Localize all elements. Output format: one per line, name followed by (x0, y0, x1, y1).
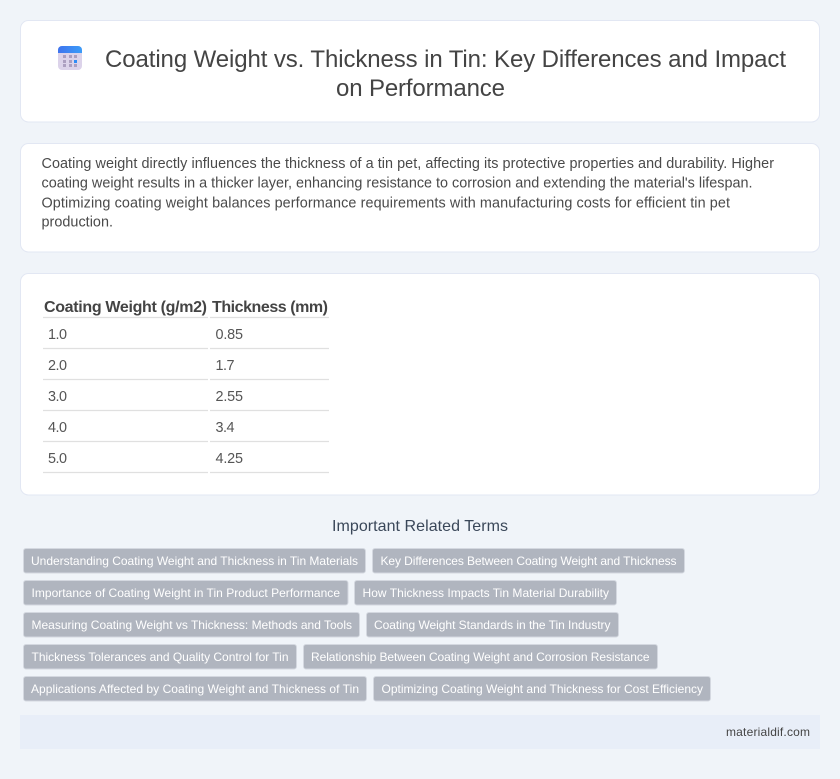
chip: Key Differences Between Coating Weight and Thickness (380, 554, 676, 568)
chip (374, 676, 710, 701)
footer source text: materialdif.com (726, 725, 810, 739)
table row 1: 0.85 (216, 327, 243, 343)
chip: Coating Weight Standards in the Tin Industry (374, 618, 610, 632)
icon: calendar (58, 46, 82, 70)
chip (372, 548, 684, 573)
table row 5: 4.25 (216, 451, 243, 467)
table header: Coating Weight (g/m2) (44, 299, 207, 316)
table header: Thickness (mm) (212, 299, 328, 316)
chip (24, 580, 348, 605)
chip: Measuring Coating Weight vs Thickness: Methods and Tools (32, 618, 352, 632)
table row 2: 2.0 (48, 358, 67, 374)
chip (24, 612, 360, 637)
panel: header (20, 20, 820, 122)
text block: description: Coating weight directly influences the thickness of a tin pet, affecting its protective properties and durability. Higher (42, 156, 774, 172)
table row 2 (43, 358, 329, 380)
chip: Understanding Coating Weight and Thickness in Tin Materials (31, 554, 358, 568)
table row 3: 2.55 (216, 389, 243, 405)
title: Coating Weight vs. Thickness in Tin: Key Differences and Impact (105, 46, 786, 73)
chip: Relationship Between Coating Weight and Corrosion Resistance (311, 650, 650, 664)
chip (24, 548, 366, 573)
title: on Performance (336, 75, 505, 102)
table row 3: 3.0 (48, 389, 67, 405)
table row 2: 1.7 (216, 358, 234, 374)
chip (24, 644, 296, 669)
table row 5 (43, 451, 329, 472)
chip: Thickness Tolerances and Quality Control for Tin (32, 650, 288, 664)
chip (24, 676, 366, 701)
text block: description: Optimizing coating weight balances performance requirements with manufacturing costs for efficient tin pet (42, 196, 730, 212)
chip: How Thickness Impacts Tin Material Durability (362, 586, 609, 600)
table row 4 (43, 420, 329, 442)
table row 4: 3.4 (216, 420, 234, 436)
title (105, 46, 786, 102)
heading: related terms: Important Related Terms (332, 518, 508, 535)
table row 3 (43, 389, 329, 410)
chip (366, 612, 618, 637)
text block: description: coating weight results in a thicker layer, enhancing resistance to corrosion and extending the material's lifespan. (42, 176, 752, 192)
text block: description (42, 156, 774, 230)
panel: table (20, 274, 820, 495)
table row 1: 1.0 (48, 327, 67, 343)
chip: Optimizing Coating Weight and Thickness for Cost Efficiency (382, 682, 703, 696)
chip (354, 580, 616, 605)
panel: related term chips (24, 548, 710, 701)
chip: Applications Affected by Coating Weight and Thickness of Tin (31, 682, 359, 696)
table row 5: 5.0 (48, 451, 67, 467)
table row 1 (43, 327, 329, 348)
table header (43, 299, 329, 318)
chip (304, 644, 658, 669)
panel: intro text (20, 144, 820, 252)
text block: description: production. (42, 214, 113, 230)
chip: Importance of Coating Weight in Tin Product Performance (32, 586, 340, 600)
table row 4: 4.0 (48, 420, 67, 436)
footer (20, 715, 820, 749)
